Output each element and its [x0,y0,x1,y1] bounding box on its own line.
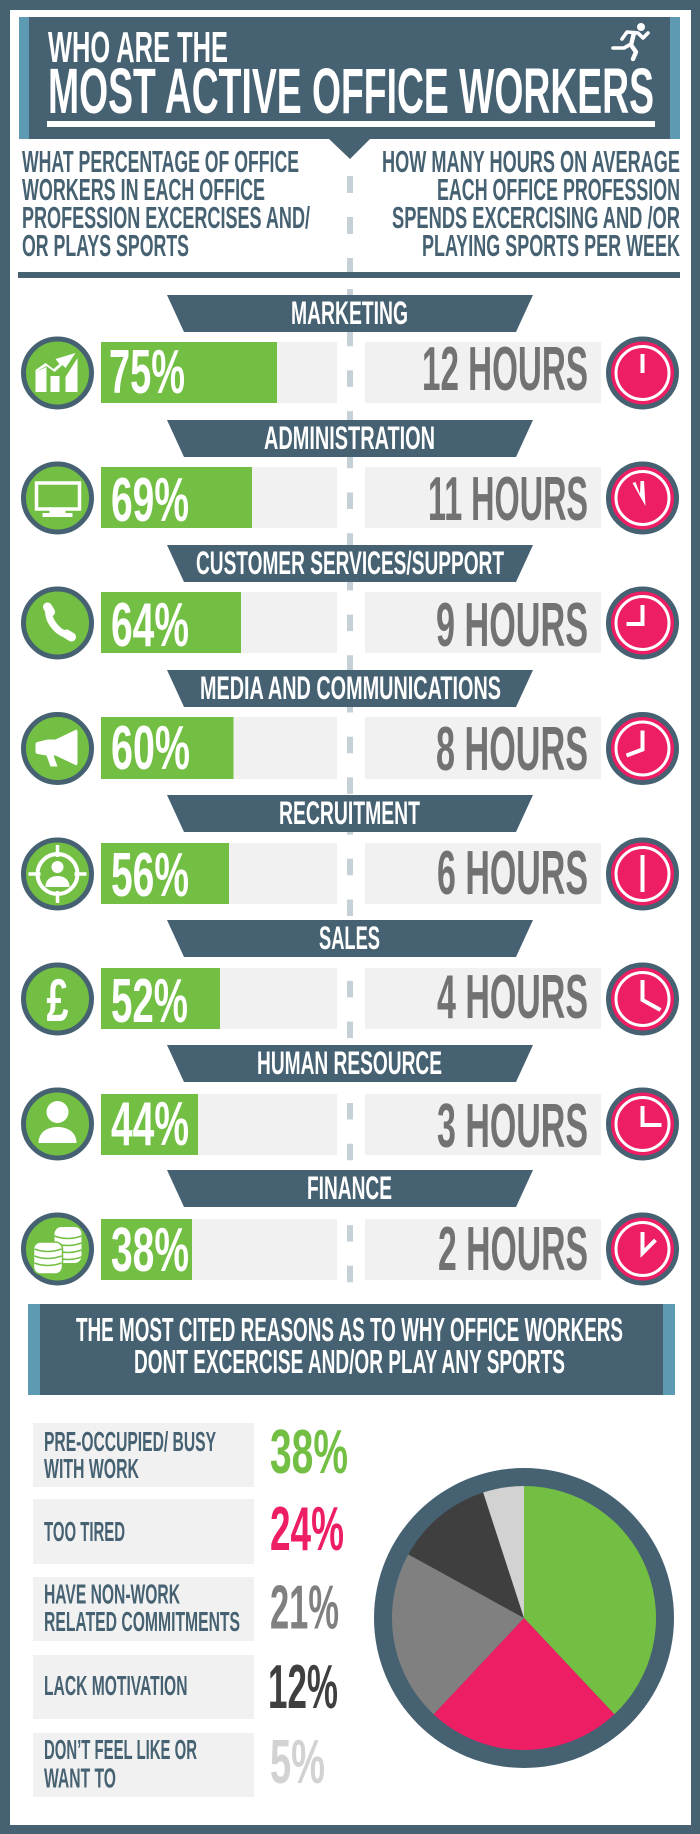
banner background [19,17,680,159]
bar: 52%: 52% [111,967,188,1036]
bar: 44%: 44% [111,1090,189,1159]
icon: clock 2 [608,1215,676,1283]
hours: 6 [365,839,601,908]
hours: 9 [365,591,601,660]
icon: runner [613,23,648,59]
icon: pound sign [24,965,92,1034]
bar: 44% [101,1090,337,1159]
reason: lack motivation [33,1653,338,1722]
centre dashed divider [347,176,353,1283]
bar: 69% [101,466,337,535]
title line one: WHO ARE THE [48,23,228,72]
heading: recruitment: RECRUITMENT [279,795,420,831]
heading: media and communications: MEDIA AND COMMUNICATIONS [200,670,501,706]
heading: customer services: CUSTOMER SERVICES/SUPPORT [196,545,504,581]
icon: telephone [24,589,92,657]
hours: 12 [365,335,601,404]
heading: finance: FINANCE [307,1170,392,1206]
heading: customer services [167,545,533,582]
icon: clock 6 [608,840,676,908]
bar: 64% [101,591,337,660]
hours: 2 [365,1215,601,1284]
icon: monitor [24,464,92,532]
reason: too tired: TOO TIRED [44,1516,125,1547]
row: finance [24,1170,676,1285]
icon: pound sign: £ [46,967,68,1034]
bar: 75%: 75% [109,338,185,407]
heading: marketing [167,295,533,332]
reason: busy with work: WITH WORK [44,1453,139,1484]
reason: busy with work: 38% [270,1418,348,1487]
icon: clock 3 [608,1090,676,1158]
icon: clock 12 [608,339,676,407]
heading: recruitment [167,795,533,832]
heading: media and communications [167,670,533,707]
reason: lack motivation: 12% [268,1653,338,1722]
icon: clock 11 [608,464,676,532]
reason: non-work commitments: HAVE NON-WORK [44,1578,180,1610]
bar: 69%: 69% [111,466,189,535]
row: customer services [24,545,676,660]
reason: lack motivation: LACK MOTIVATION [44,1670,188,1701]
icon: megaphone [24,714,92,782]
hours: 11 [365,465,601,534]
reason: too tired [33,1495,344,1564]
reason: non-work commitments: 21% [270,1574,339,1642]
heading: human resource: HUMAN RESOURCE [257,1045,442,1081]
icon: clock 4 [608,965,676,1033]
icon: person [24,1090,92,1158]
row: media and communications [24,670,676,784]
bar: 38%: 38% [111,1216,189,1285]
banner side accents [19,17,680,139]
reason: don't feel like it: 5% [270,1728,325,1797]
reason: don't feel like it: WANT TO [44,1762,116,1794]
heading: marketing: MARKETING [291,295,408,331]
reason: non-work commitments: RELATED COMMITMENTS [44,1606,240,1637]
reason: don't feel like it: DON’T FEEL LIKE OR [44,1734,197,1765]
hours: 8 [365,715,601,784]
intro text: percentage column: OR PLAYS SPORTS [22,228,189,263]
row: sales [24,920,676,1036]
intro text: hours column [382,144,680,263]
bar: 75% [101,338,337,407]
bar: 38% [101,1216,337,1285]
icon: coins [24,1215,92,1283]
icon: clock 8 [608,714,676,782]
intro text: percentage column [22,144,310,263]
pie chart [374,1468,674,1768]
bar: 56%: 56% [111,841,189,910]
heading: sales: SALES [319,920,380,956]
bar: 60%: 60% [111,714,190,783]
hours: 3 [365,1092,601,1161]
icon: target person [24,840,92,908]
reason: busy with work [33,1418,348,1487]
reason: don't feel like it [33,1728,325,1797]
row: human resource [24,1045,676,1161]
icon: clock 9 [608,589,676,657]
intro text: percentage column: WHAT PERCENTAGE OF OFFICE [22,144,299,179]
intro text: percentage column: PROFESSION EXCERCISES AND/ [22,200,310,235]
reason: too tired: 24% [270,1495,344,1564]
reason: busy with work: PRE-OCCUPIED/ BUSY [44,1426,216,1457]
bar: 64%: 64% [111,591,189,660]
icon: growth chart [24,339,92,407]
bar: 52% [101,967,337,1036]
bar: 56% [101,841,337,910]
row: marketing [24,295,676,407]
section rule [18,272,680,278]
title banner [19,17,680,159]
heading: finance [167,1170,533,1207]
heading: human resource [167,1045,533,1082]
hours: 4 [365,963,601,1032]
row: administration [24,420,676,535]
reason: non-work commitments [33,1574,339,1642]
row: recruitment [24,795,676,910]
heading: sales [167,920,533,957]
intro text: percentage column: WORKERS IN EACH OFFICE [22,172,265,207]
reasons heading band [28,1304,675,1395]
title underline [47,121,655,127]
heading: administration: ADMINISTRATION [264,420,435,456]
bar: 60% [101,714,337,783]
